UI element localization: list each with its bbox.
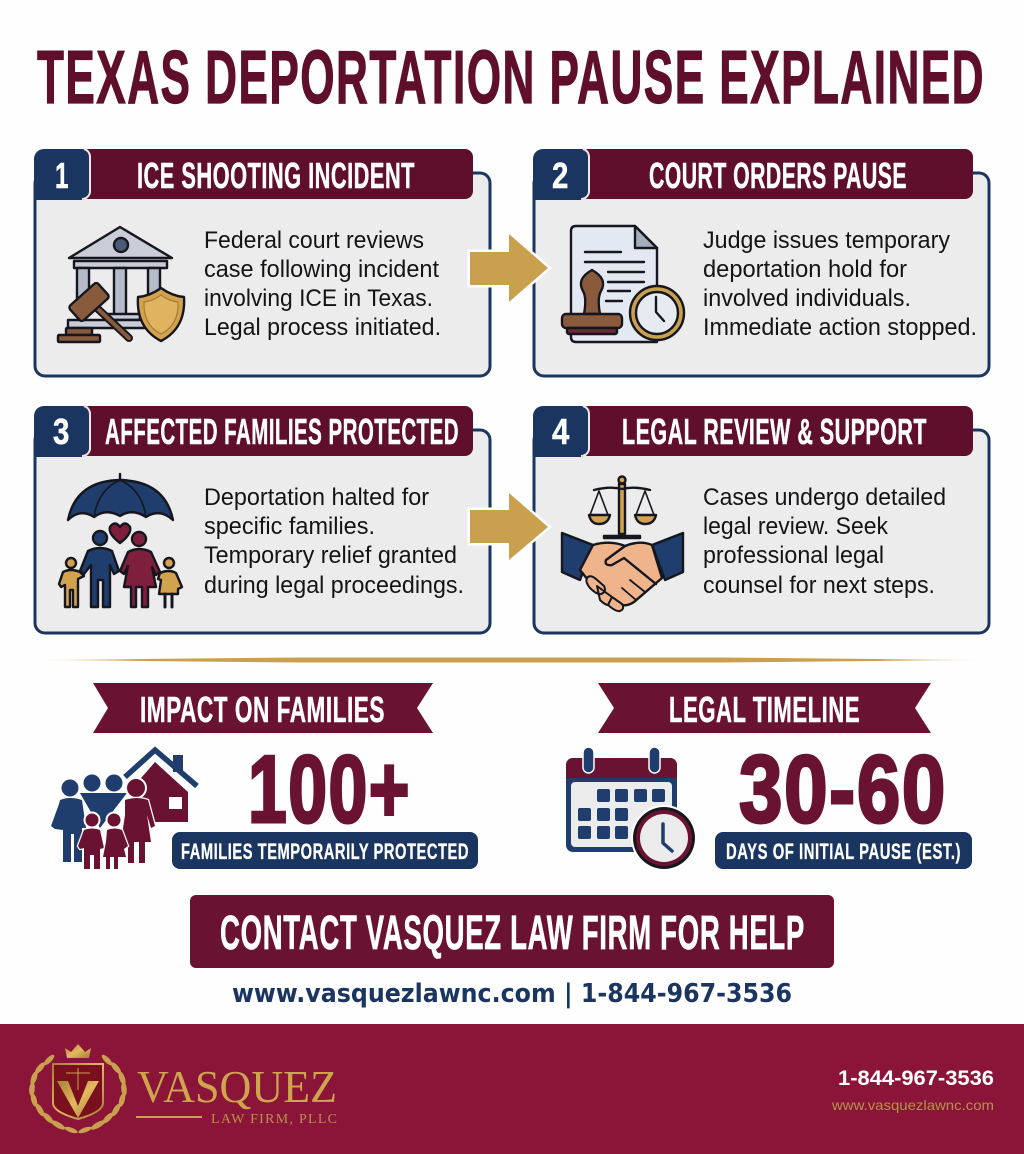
description: Cases undergo detailed	[703, 484, 946, 511]
description: professional legal	[703, 542, 884, 569]
panel: step 1	[34, 149, 490, 376]
panel: step 3	[34, 406, 490, 633]
description: counsel for next steps.	[703, 572, 935, 599]
panel: step 2	[533, 149, 989, 376]
ribbon heading: LEGAL TIMELINE	[669, 689, 860, 730]
arrow: step 3 to step 4	[470, 493, 548, 560]
card body	[534, 173, 989, 376]
description: Judge issues temporary	[703, 227, 950, 254]
description: Immediate action stopped.	[703, 314, 977, 341]
description: Temporary relief granted	[204, 542, 457, 569]
number badge: 2	[552, 155, 569, 196]
footer phone: 1-844-967-3536	[838, 1067, 994, 1090]
icon: family under umbrella	[59, 474, 182, 607]
logo crest	[29, 1044, 127, 1135]
number badge	[533, 149, 589, 200]
stat: legal timeline	[566, 683, 972, 871]
header bar	[80, 406, 473, 456]
card body	[35, 173, 490, 376]
call to action	[190, 895, 834, 968]
card body	[35, 430, 490, 633]
big number: 30-60	[739, 736, 947, 843]
arrow: step 1 to step 2	[470, 234, 548, 302]
description: case following incident	[204, 256, 439, 283]
panel: step 4	[533, 406, 989, 633]
description	[204, 484, 464, 599]
header bar	[580, 149, 973, 199]
header bar	[580, 406, 973, 456]
description: legal review. Seek	[703, 513, 889, 540]
heading: AFFECTED FAMILIES PROTECTED	[105, 411, 459, 452]
description: deportation hold for	[703, 256, 907, 283]
icon: courthouse, gavel and shield	[58, 227, 184, 342]
header bar	[80, 149, 473, 199]
number badge	[533, 406, 589, 457]
description: specific families.	[204, 513, 375, 540]
icon: calendar and clock	[566, 747, 697, 871]
stat label: FAMILIES TEMPORARILY PROTECTED	[181, 839, 469, 864]
description	[703, 227, 977, 341]
icon: document, stamp and clock	[562, 226, 684, 342]
heading: ICE SHOOTING INCIDENT	[137, 155, 415, 196]
description: Legal process initiated.	[204, 314, 441, 341]
stat label	[172, 832, 478, 869]
number badge: 1	[55, 155, 69, 196]
logo wordmark: VASQUEZ	[137, 1061, 337, 1112]
description: involved individuals.	[703, 285, 911, 312]
number badge: 3	[53, 411, 70, 452]
icon: scales and handshake	[562, 476, 683, 611]
number badge: 4	[552, 411, 570, 452]
stat: impact on families	[51, 683, 478, 869]
description	[204, 227, 441, 341]
logo wordmark: LAW FIRM, PLLC	[211, 1112, 337, 1127]
ribbon heading: IMPACT ON FAMILIES	[140, 689, 385, 730]
footer band	[0, 1024, 1024, 1154]
description: during legal proceedings.	[204, 572, 464, 599]
stat label	[715, 832, 972, 869]
big number: 100+	[248, 736, 411, 843]
description: Deportation halted for	[204, 484, 429, 511]
ribbon heading	[93, 683, 433, 733]
number badge	[34, 406, 90, 457]
footer website: www.vasquezlawnc.com	[831, 1097, 994, 1113]
card body	[534, 430, 989, 633]
description: Federal court reviews	[204, 227, 424, 254]
number badge	[34, 149, 90, 200]
icon: family and house	[51, 750, 197, 869]
ribbon heading	[598, 683, 931, 733]
description	[703, 484, 946, 599]
description: involving ICE in Texas.	[204, 285, 433, 312]
contact line: www.vasquezlawnc.com | 1-844-967-3536	[232, 979, 792, 1009]
